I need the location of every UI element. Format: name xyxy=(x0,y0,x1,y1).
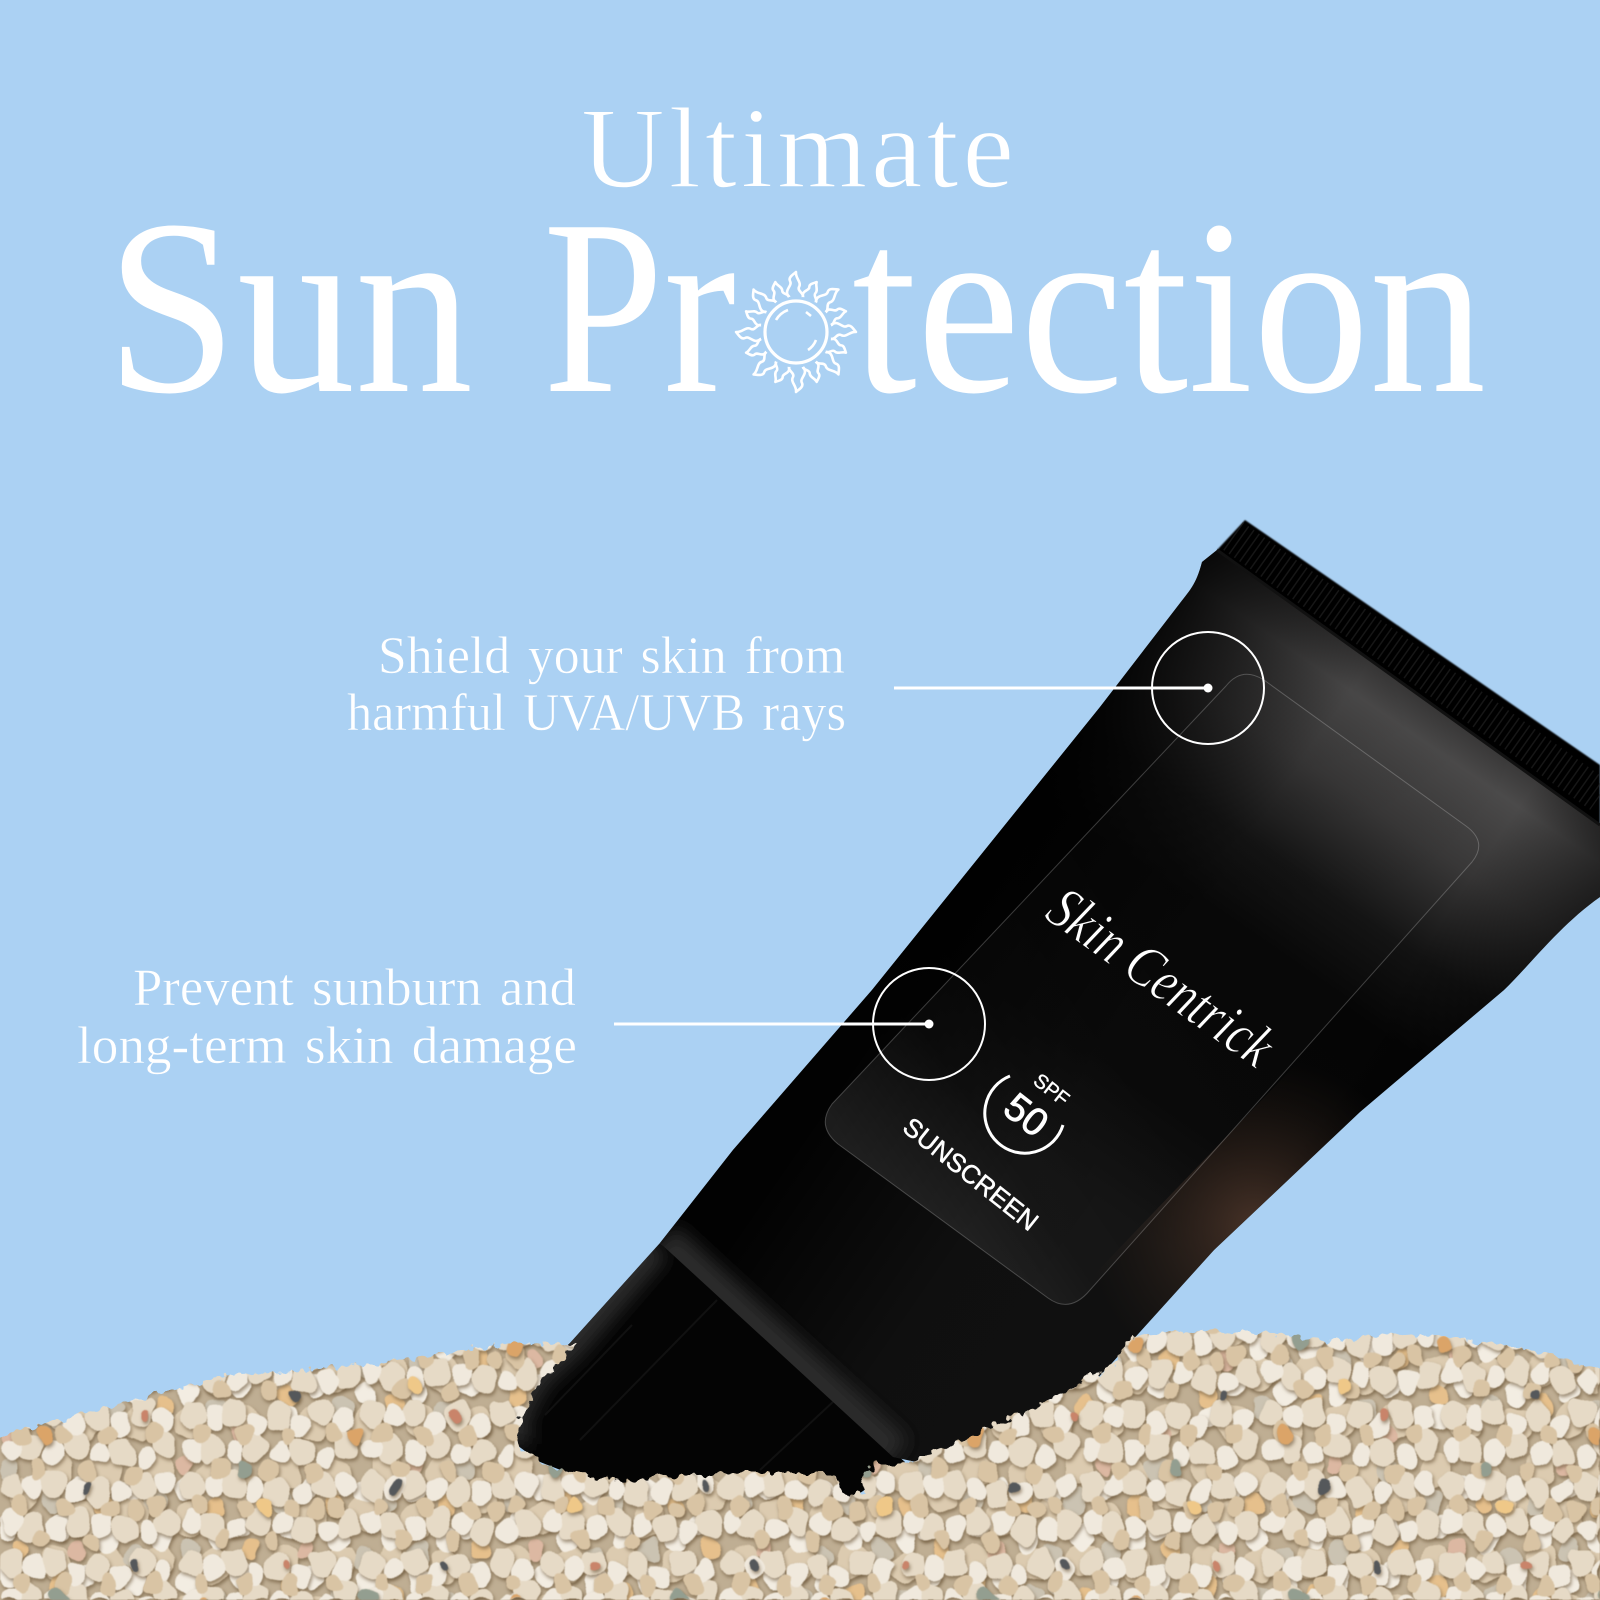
seam highlight xyxy=(660,1243,893,1457)
tube body xyxy=(660,550,1600,1480)
tube cap xyxy=(510,1243,905,1500)
callout: sunburn xyxy=(77,959,985,1080)
callout text xyxy=(77,959,577,1075)
icon: sun xyxy=(736,272,856,392)
product label panel xyxy=(825,674,1479,1304)
callout pointer xyxy=(894,632,1264,744)
callout: UVA/UVB xyxy=(347,627,1264,744)
sand xyxy=(0,1328,1600,1600)
title word end: tection: tection xyxy=(852,169,1486,446)
pebble layer back xyxy=(0,1329,1600,1600)
brand name: Skin Centrick xyxy=(1035,874,1288,1080)
callout pointer xyxy=(614,968,985,1080)
sunscreen tube xyxy=(510,520,1600,1500)
SPF 50 badge: 50 xyxy=(995,1085,1056,1146)
SPF 50 badge xyxy=(985,1070,1073,1153)
crimp seam line xyxy=(1217,550,1600,825)
sand base xyxy=(0,1331,1600,1600)
callout text: harmful UVA/UVB rays xyxy=(347,684,846,742)
pebble layer front xyxy=(0,1328,1600,1600)
title word: Sun: Sun xyxy=(106,169,473,446)
callout text: long-term skin damage xyxy=(77,1017,577,1075)
callout text: Prevent sunburn and xyxy=(133,959,576,1017)
callout text: Shield your skin from xyxy=(378,627,845,685)
tube crimp seal xyxy=(1217,520,1600,825)
tube body shading xyxy=(660,550,1600,1480)
product type: SUNSCREEN xyxy=(897,1111,1044,1237)
callout text xyxy=(347,627,846,742)
title word: Pr: Pr xyxy=(543,169,736,446)
title line: Ultimate: Ultimate xyxy=(581,85,1014,213)
brown reflection xyxy=(1000,990,1504,1480)
accent pebbles layer xyxy=(36,1334,1600,1600)
title xyxy=(106,85,1014,446)
SPF 50 badge: SPF xyxy=(1029,1070,1073,1111)
